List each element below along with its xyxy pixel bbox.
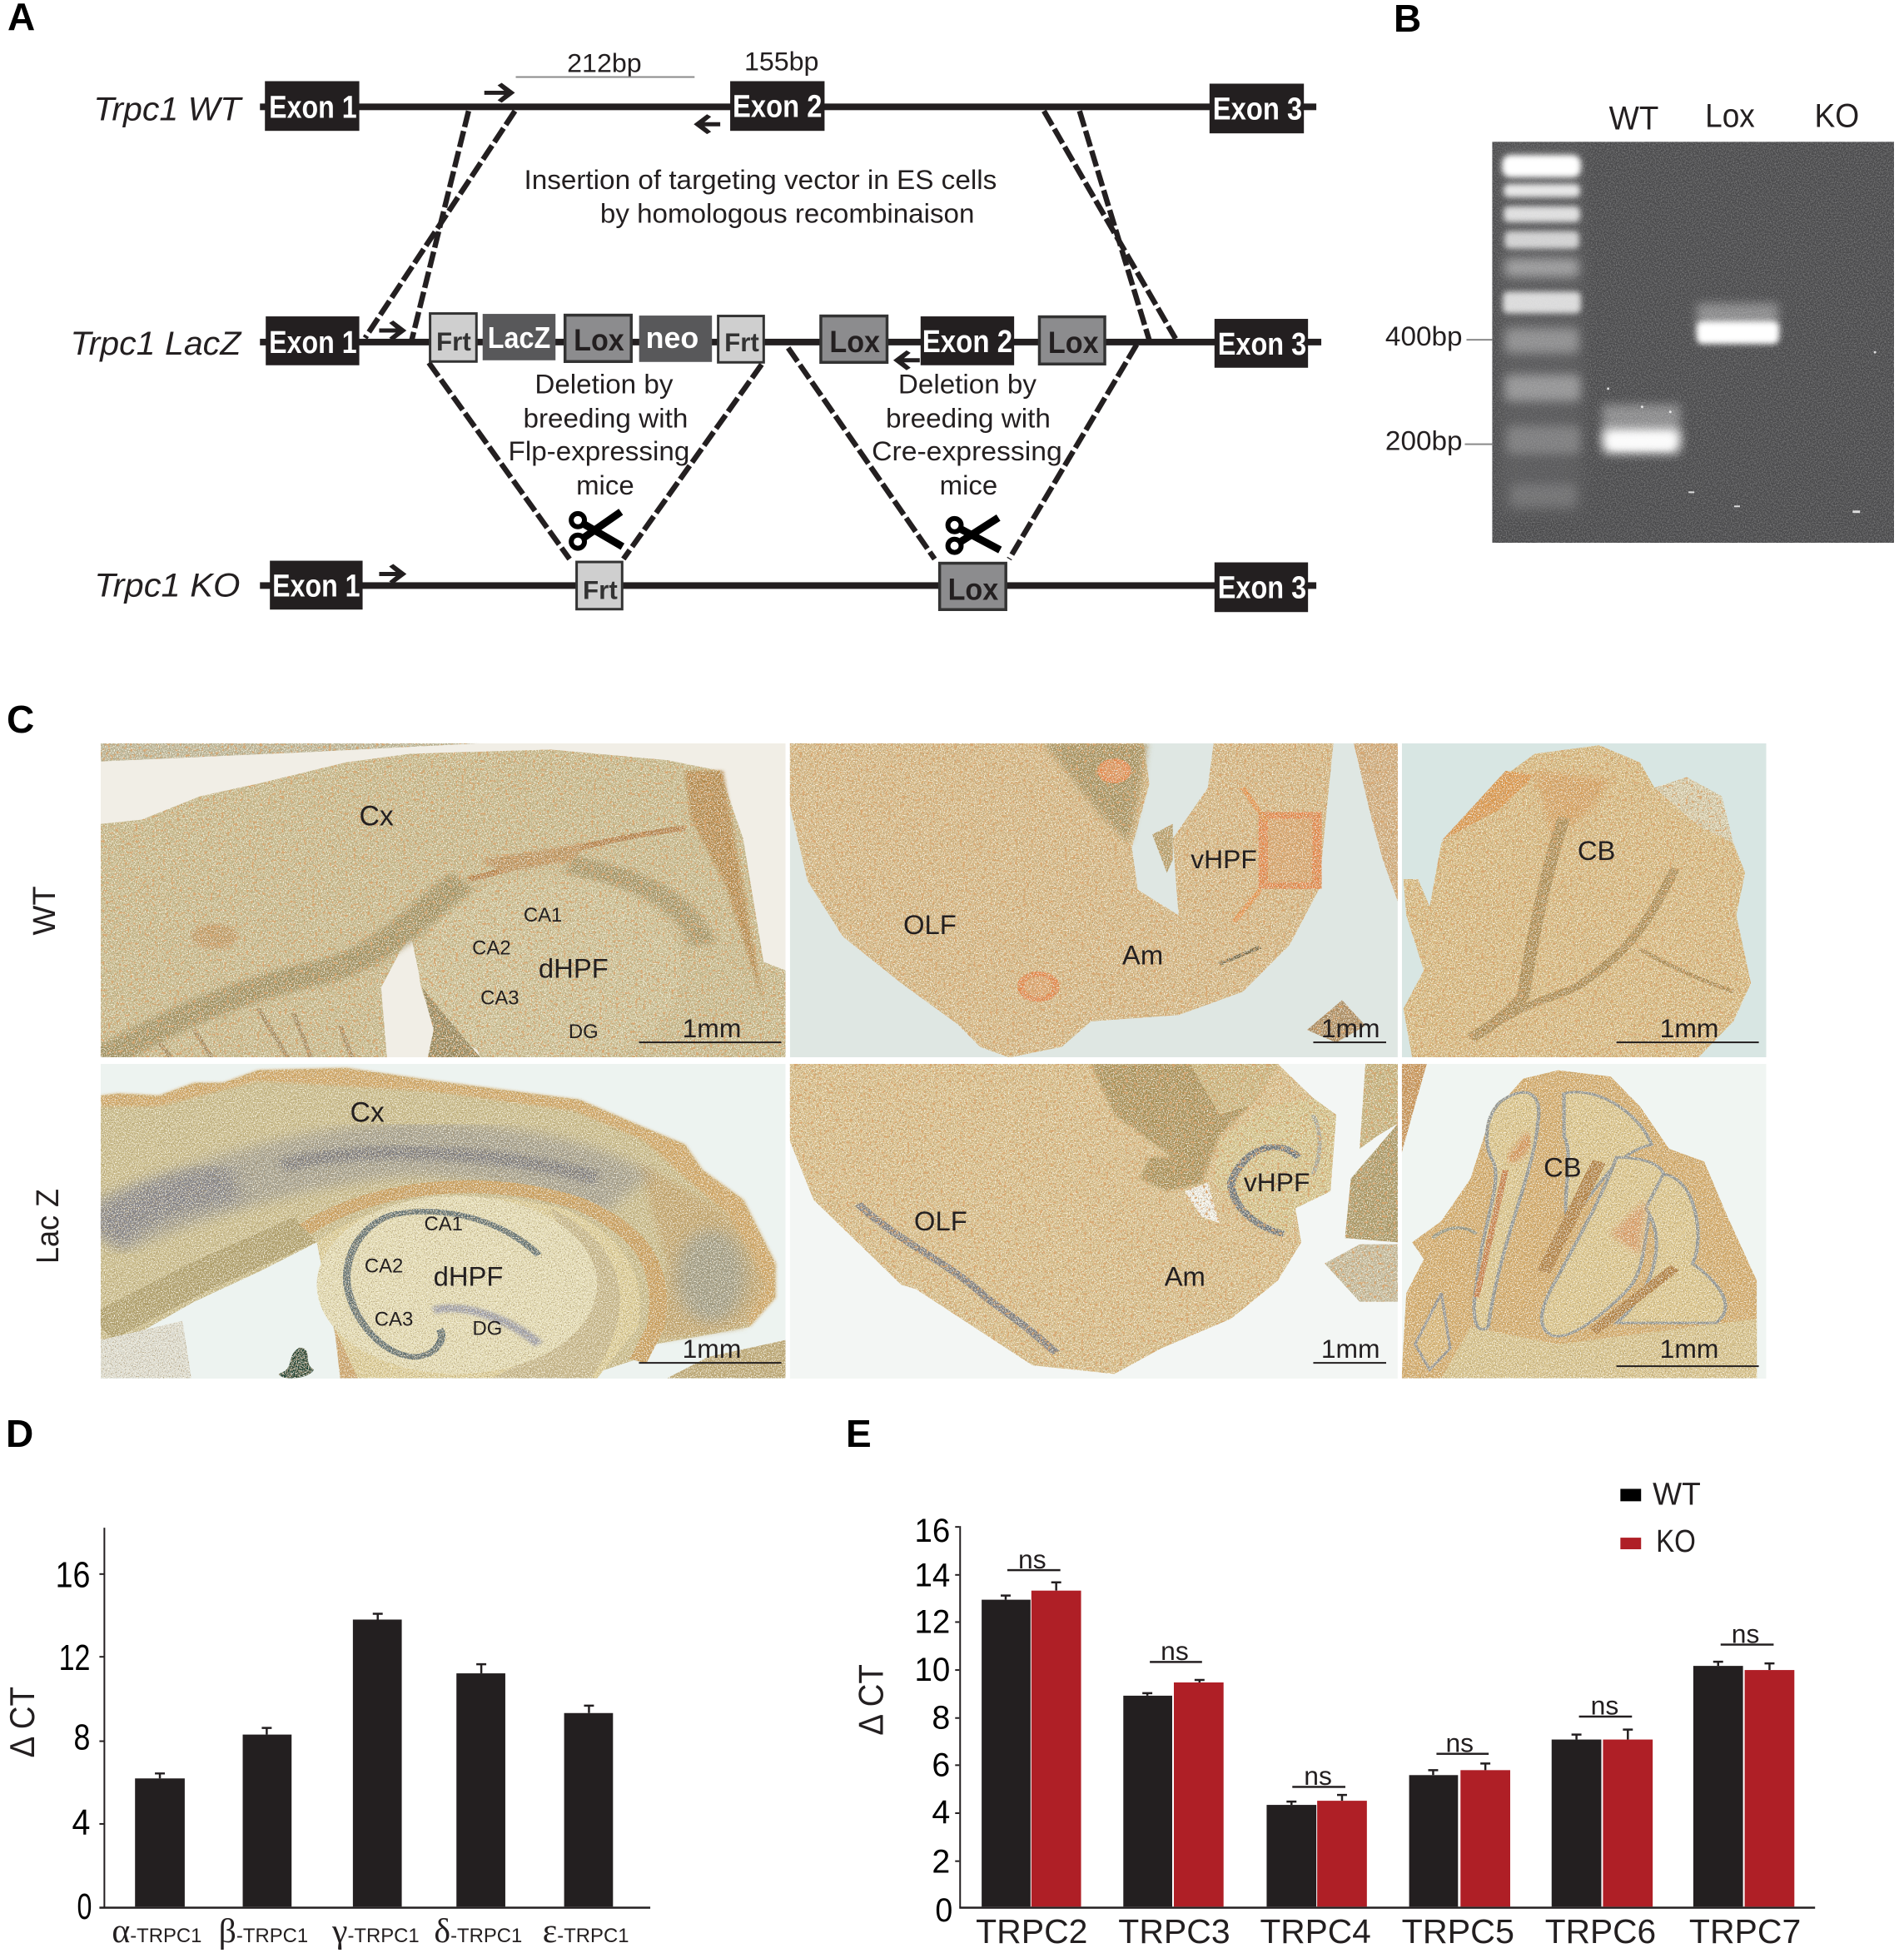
legend bbox=[1620, 1477, 1701, 1559]
labels bbox=[914, 1167, 1380, 1364]
x axis labels bbox=[976, 1912, 1801, 1951]
amplicon annotations 212bp 155bp bbox=[516, 47, 818, 78]
labels: CB bbox=[1578, 835, 1615, 866]
text: deletion by Cre: Cre-expressing bbox=[872, 435, 1062, 466]
labels bbox=[903, 844, 1380, 1043]
text: deletion by Flp bbox=[509, 369, 689, 500]
lane labels: Lox bbox=[1705, 97, 1755, 134]
scale bar bbox=[639, 1362, 782, 1364]
y axis labels: 16 bbox=[56, 1555, 90, 1596]
labels: CA2 bbox=[472, 937, 511, 960]
row: Trpc1 LacZ: Exon 2 bbox=[922, 325, 1012, 360]
row label WT: WT bbox=[27, 886, 62, 936]
y axis title: Δ CT bbox=[852, 1664, 891, 1736]
labels: Cx bbox=[359, 800, 394, 832]
y axis labels: 16 bbox=[915, 1513, 950, 1549]
y axis labels: 6 bbox=[932, 1747, 950, 1783]
y axis labels: 8 bbox=[74, 1717, 90, 1757]
labels: 1mm bbox=[683, 1334, 741, 1364]
axes bbox=[955, 1526, 1815, 1909]
specks bbox=[1607, 351, 1877, 513]
x axis labels: TRPC5 bbox=[1402, 1912, 1514, 1951]
text: deletion by Flp: breeding with bbox=[523, 402, 688, 433]
text: deletion by Cre: Deletion by bbox=[898, 369, 1037, 400]
row: Trpc1 WT: Trpc1 WT bbox=[93, 91, 243, 127]
row: Trpc1 LacZ bbox=[71, 314, 1321, 368]
scale bar bbox=[1313, 1041, 1386, 1043]
y axis labels: 12 bbox=[915, 1603, 950, 1640]
image: LacZ ventral section bbox=[789, 1064, 1398, 1379]
error bars bbox=[1001, 1583, 1774, 1805]
significance markers: ns bbox=[1161, 1636, 1189, 1666]
y axis labels: 8 bbox=[932, 1700, 950, 1737]
y axis labels: 4 bbox=[932, 1794, 950, 1831]
row: Trpc1 KO: Lox bbox=[948, 572, 999, 606]
row: Trpc1 KO: Trpc1 KO bbox=[94, 567, 240, 604]
labels bbox=[1578, 835, 1718, 1043]
legend: WT bbox=[1653, 1477, 1701, 1512]
x axis labels: δ-TRPC1 bbox=[434, 1912, 522, 1951]
panel C: histology bbox=[7, 698, 1767, 1379]
significance markers: ns bbox=[1304, 1761, 1332, 1791]
chart E body bbox=[852, 1477, 1815, 1951]
text: deletion by Cre: mice bbox=[940, 470, 997, 500]
labels: Cx bbox=[350, 1097, 385, 1129]
row: Trpc1 LacZ: neo bbox=[646, 321, 698, 355]
labels: OLF bbox=[914, 1205, 967, 1236]
labels: CA1 bbox=[524, 904, 562, 927]
band Lox 400bp bbox=[1697, 303, 1779, 344]
text: insertion of targeting vector bbox=[524, 164, 997, 229]
x axis labels: γ-TRPC1 bbox=[331, 1912, 420, 1951]
lane labels: WT bbox=[1609, 100, 1658, 137]
row: Trpc1 WT bbox=[93, 82, 1316, 133]
labels: DG bbox=[569, 1021, 599, 1043]
labels: 1mm bbox=[1321, 1334, 1380, 1364]
gel image bbox=[1492, 142, 1894, 543]
y axis labels: 12 bbox=[59, 1637, 90, 1678]
y axis labels: 0 bbox=[77, 1886, 92, 1927]
text: insertion of targeting vector: by homologous recombinaison bbox=[600, 198, 974, 229]
size labels: 400bp bbox=[1385, 321, 1462, 351]
panel letter E: E bbox=[846, 1412, 872, 1455]
image: LacZ cerebellum bbox=[1402, 1064, 1767, 1379]
x axis labels bbox=[112, 1912, 629, 1951]
labels: DG bbox=[473, 1317, 502, 1339]
row: Trpc1 LacZ: LacZ bbox=[488, 321, 550, 355]
y axis labels bbox=[915, 1513, 952, 1929]
panel A: gene targeting schematic bbox=[7, 0, 1321, 612]
y axis title: Δ CT bbox=[2, 1687, 42, 1757]
row: Trpc1 KO: Exon 1 bbox=[272, 569, 360, 604]
bars bbox=[135, 1619, 613, 1906]
text: deletion by Flp: Deletion by bbox=[534, 369, 674, 400]
row: Trpc1 LacZ: Lox bbox=[1048, 326, 1099, 360]
image: WT ventral section bbox=[789, 743, 1398, 1057]
y axis labels: 14 bbox=[915, 1558, 950, 1594]
amplicon annotations 212bp 155bp: 155bp bbox=[744, 47, 818, 77]
labels: vHPF bbox=[1244, 1167, 1310, 1197]
labels: CA2 bbox=[365, 1255, 403, 1278]
chart D body bbox=[2, 1528, 650, 1951]
y axis labels: 4 bbox=[72, 1802, 90, 1843]
significance markers: ns bbox=[1591, 1691, 1618, 1721]
y axis labels: 10 bbox=[915, 1652, 950, 1688]
image: WT cortex and dorsal hippocampus bbox=[101, 743, 786, 1066]
labels: Am bbox=[1165, 1261, 1206, 1292]
y axis labels bbox=[56, 1555, 92, 1927]
text: insertion of targeting vector: Insertion of targeting vector in ES cells bbox=[524, 164, 997, 195]
lane labels: KO bbox=[1814, 97, 1859, 134]
row: Trpc1 WT: Exon 2 bbox=[733, 89, 822, 124]
labels: vHPF bbox=[1191, 844, 1257, 874]
labels: CB bbox=[1544, 1151, 1582, 1182]
row: Trpc1 LacZ: Frt bbox=[436, 326, 471, 356]
labels bbox=[359, 800, 741, 1043]
image: WT cerebellum bbox=[1402, 743, 1767, 1057]
labels: CA3 bbox=[375, 1308, 413, 1330]
text: deletion by Flp: mice bbox=[576, 470, 634, 500]
scale bar bbox=[1617, 1041, 1759, 1043]
row: Trpc1 KO bbox=[94, 561, 1316, 612]
labels bbox=[1544, 1151, 1718, 1364]
schematic body bbox=[71, 47, 1321, 612]
panel letter D: D bbox=[6, 1412, 33, 1455]
row: Trpc1 WT: Exon 3 bbox=[1213, 92, 1302, 127]
x axis labels: TRPC4 bbox=[1260, 1912, 1371, 1951]
amplicon annotations 212bp 155bp: 212bp bbox=[567, 48, 642, 78]
gel group with labels bbox=[1385, 97, 1894, 543]
row: Trpc1 LacZ: Lox bbox=[574, 323, 624, 357]
scale bar bbox=[639, 1041, 782, 1043]
x axis labels: α-TRPC1 bbox=[112, 1912, 201, 1951]
labels bbox=[350, 1097, 741, 1364]
significance markers: ns bbox=[1732, 1618, 1759, 1648]
dashed recombination lines bbox=[365, 111, 1176, 559]
bars KO bbox=[1032, 1591, 1794, 1906]
axes bbox=[99, 1528, 650, 1909]
labels: dHPF bbox=[434, 1261, 503, 1292]
y axis labels: 0 bbox=[935, 1892, 952, 1929]
legend: KO bbox=[1656, 1524, 1696, 1559]
x axis labels: TRPC3 bbox=[1118, 1912, 1230, 1951]
image: LacZ cortex and dorsal hippocampus bbox=[101, 1064, 786, 1379]
row: Trpc1 KO: Frt bbox=[583, 574, 618, 604]
panel letter C: C bbox=[7, 698, 34, 741]
labels: CA3 bbox=[480, 986, 519, 1009]
row label LacZ: Lac Z bbox=[31, 1189, 66, 1264]
icon: scissors right bbox=[948, 518, 1000, 553]
size labels: 200bp bbox=[1385, 425, 1462, 456]
significance markers: ns bbox=[1018, 1544, 1046, 1574]
labels: Am bbox=[1122, 940, 1163, 971]
size labels bbox=[1385, 321, 1492, 456]
x axis labels: TRPC2 bbox=[976, 1912, 1087, 1951]
significance markers bbox=[1007, 1544, 1773, 1791]
x axis labels: TRPC6 bbox=[1545, 1912, 1656, 1951]
row: Trpc1 LacZ: Frt bbox=[724, 327, 759, 357]
row: Trpc1 LacZ: Lox bbox=[829, 325, 881, 359]
icon: scissors left bbox=[571, 512, 623, 549]
bars WT bbox=[982, 1600, 1743, 1906]
primer arrows bbox=[379, 82, 920, 584]
error bars bbox=[155, 1614, 594, 1778]
labels: CA1 bbox=[424, 1213, 463, 1235]
row: Trpc1 LacZ: Trpc1 LacZ bbox=[71, 326, 242, 362]
scale bar bbox=[1313, 1362, 1386, 1364]
labels: 1mm bbox=[1660, 1013, 1718, 1043]
row: Trpc1 LacZ: Exon 3 bbox=[1218, 327, 1306, 362]
row: Trpc1 WT: Exon 1 bbox=[269, 90, 357, 125]
band WT 200bp bbox=[1603, 405, 1680, 454]
row: Trpc1 LacZ: Exon 1 bbox=[269, 326, 357, 360]
lane labels bbox=[1609, 97, 1859, 137]
text: deletion by Cre bbox=[872, 369, 1062, 500]
panel B: genotyping gel bbox=[1385, 0, 1894, 543]
x axis labels: TRPC7 bbox=[1689, 1912, 1801, 1951]
labels: OLF bbox=[903, 909, 957, 940]
x axis labels: β-TRPC1 bbox=[219, 1912, 308, 1951]
panel D: bar chart of TRPC1 isoforms bbox=[2, 1412, 650, 1951]
ladder lane bbox=[1499, 145, 1583, 514]
y axis labels: 2 bbox=[932, 1844, 950, 1881]
x axis labels: ε-TRPC1 bbox=[543, 1912, 629, 1951]
significance markers: ns bbox=[1445, 1727, 1474, 1757]
text: deletion by Flp: Flp-expressing bbox=[509, 435, 689, 466]
scale bar bbox=[1617, 1365, 1759, 1367]
text: deletion by Cre: breeding with bbox=[886, 402, 1051, 433]
labels: 1mm bbox=[683, 1013, 741, 1043]
panel E: bar chart of TRPC2-7 bbox=[846, 1412, 1815, 1951]
labels: 1mm bbox=[1321, 1013, 1380, 1043]
labels: dHPF bbox=[539, 952, 609, 983]
row: Trpc1 KO: Exon 3 bbox=[1218, 570, 1306, 605]
labels: 1mm bbox=[1660, 1334, 1718, 1364]
